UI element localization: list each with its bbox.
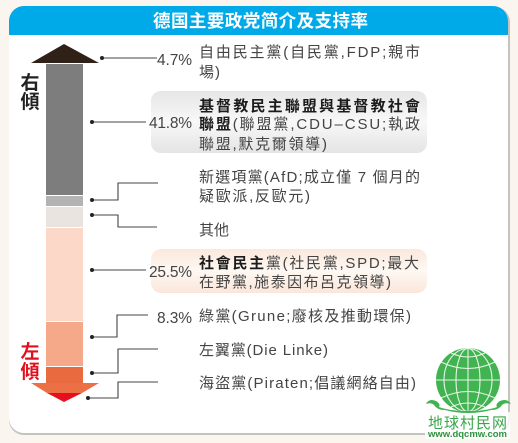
icon: globe xyxy=(426,348,511,413)
text: SPD: 社會民主黨(社民黨,SPD;最大 xyxy=(199,254,419,272)
label: right xyxy=(20,72,40,113)
percentages xyxy=(149,52,192,327)
percentages: 4.7% xyxy=(157,52,192,69)
label: left: 傾 xyxy=(20,361,40,383)
percentages: 41.8% xyxy=(149,115,192,132)
label: left xyxy=(20,341,40,383)
text: FDP: 自由民主黨(自民黨,FDP;親市 xyxy=(199,44,420,61)
connector dots xyxy=(86,56,104,400)
watermark text: 地球村民网 xyxy=(428,415,507,432)
arrow: right top xyxy=(31,44,99,63)
text: AfD: 新選項黨(AfD;成立僅 7 個月的 xyxy=(199,169,420,186)
text: Greens: 綠黨(Grune;廢核及推動環保) xyxy=(199,307,411,325)
text: SPD xyxy=(199,254,419,291)
ribbon xyxy=(426,400,511,413)
label: right: 傾 xyxy=(20,91,40,113)
title xyxy=(9,6,508,35)
text: Die Linke: 左翼黨(Die Linke) xyxy=(199,342,328,359)
watermark backing xyxy=(425,412,510,439)
text: AfD xyxy=(199,169,420,205)
text: CDU-CSU: 基督教民主聯盟與基督教社會 xyxy=(199,97,420,115)
text: CDU-CSU: 聯盟(聯盟黨,CDU–CSU;執政 xyxy=(199,116,420,133)
title: 德国主要政党简介及支持率 xyxy=(153,11,368,31)
text: SPD: 在野黨,施泰因布呂克領導) xyxy=(199,274,391,291)
percentages: 8.3% xyxy=(157,310,192,327)
label: right: 右 xyxy=(20,72,40,94)
percentages: 25.5% xyxy=(149,264,192,281)
spectrum bar xyxy=(31,44,99,402)
connector lines xyxy=(88,58,158,398)
text: CDU-CSU xyxy=(199,97,420,153)
watermark url: www.dqcmw.com xyxy=(427,429,507,439)
highlight: CDU-CSU xyxy=(151,91,427,153)
text: FDP: 場) xyxy=(199,64,220,81)
text: CDU-CSU: 聯盟,默克爾領導) xyxy=(199,136,327,153)
arrow: left bottom xyxy=(31,383,99,402)
watermark logo xyxy=(425,348,511,439)
highlight: SPD xyxy=(151,249,427,293)
label: left: 左 xyxy=(20,341,40,363)
text: others: 其他 xyxy=(199,222,229,239)
text: AfD: 疑歐派,反歐元) xyxy=(199,188,310,205)
text: Pirates: 海盜黨(Piraten;倡議網絡自由) xyxy=(199,374,416,392)
text: FDP xyxy=(199,44,420,81)
